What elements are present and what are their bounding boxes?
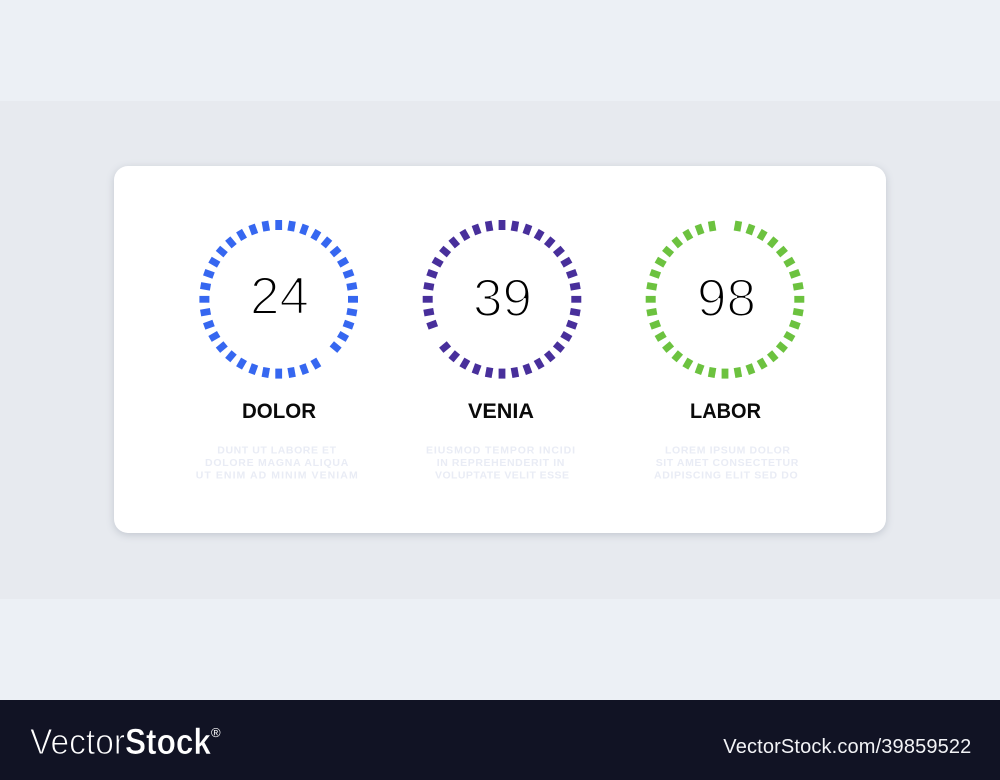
- footer logo: [30, 721, 221, 762]
- description: venia: [426, 444, 575, 482]
- description: dolor: DUNT UT LABORE ET: [217, 444, 337, 456]
- description: dolor: [196, 444, 358, 482]
- background band: [0, 101, 1000, 599]
- description: dolor: UT ENIM AD MINIM VENIAM: [196, 470, 358, 482]
- value: 39: 39: [473, 269, 532, 328]
- description: venia: IN REPREHENDERIT IN: [437, 457, 564, 469]
- value: 24: 24: [250, 267, 309, 326]
- value: 98: 98: [697, 269, 756, 328]
- heading: VENIA: VENIA: [468, 400, 534, 423]
- panel: labor column: [646, 221, 804, 482]
- description: labor: SIT AMET CONSECTETUR: [656, 457, 799, 469]
- panel: white card: [114, 166, 886, 533]
- description: dolor: DOLORE MAGNA ALIQUA: [205, 457, 349, 469]
- description: labor: LOREM IPSUM DOLOR: [665, 444, 790, 456]
- footer logo: ®: [211, 725, 221, 740]
- footer logo: Vector: [30, 721, 125, 762]
- heading: LABOR: LABOR: [690, 400, 761, 423]
- panel: dolor column: [196, 220, 358, 481]
- description: venia: VOLUPTATE VELIT ESSE: [435, 470, 569, 482]
- description: venia: EIUSMOD TEMPOR INCIDI: [426, 444, 575, 456]
- panel: venia column: [423, 220, 581, 481]
- footer bar: [0, 700, 1000, 780]
- heading: DOLOR: DOLOR: [242, 400, 316, 423]
- description: labor: [654, 444, 799, 482]
- footer image id: VectorStock.com/39859522: [723, 736, 971, 758]
- ring chart: 24: [199, 220, 358, 379]
- footer logo: Stock: [125, 721, 212, 762]
- description: labor: ADIPISCING ELIT SED DO: [654, 470, 798, 482]
- ring chart: 98: [646, 221, 804, 379]
- ring chart: 39: [423, 220, 581, 379]
